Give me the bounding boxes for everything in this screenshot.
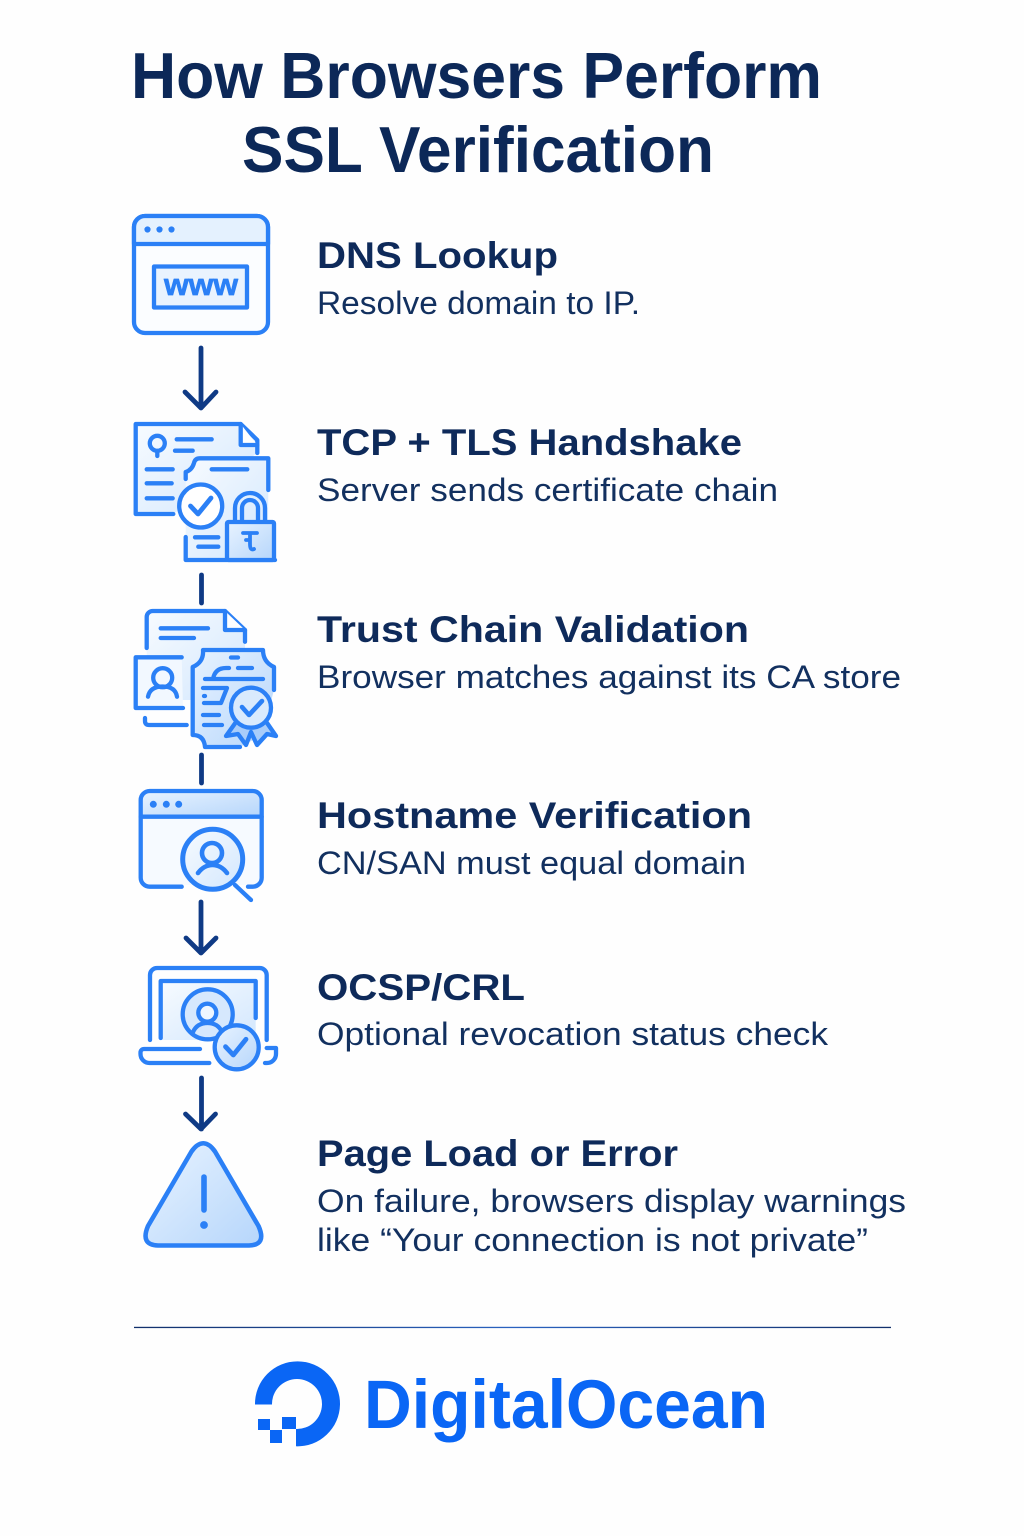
heading and text: DNS Lookup: DNS Lookup — [317, 235, 558, 276]
heading and text: Hostname Verification: CN/SAN must equal domain — [317, 845, 746, 881]
heading and text: Trust Chain Validation — [317, 609, 901, 695]
icon: certificate documents with lock — [136, 424, 275, 560]
title: How Browsers Perform — [131, 39, 822, 112]
arrow: step 4 to 5 — [186, 902, 216, 953]
heading and text: OCSP/CRL: OCSP/CRL — [317, 967, 525, 1008]
icon: browser window with www: www — [163, 267, 239, 302]
icon: browser window with magnifier and user — [141, 791, 262, 900]
heading and text: Page Load or Error — [317, 1133, 906, 1258]
title: SSL Verification — [242, 113, 714, 186]
heading and text: TCP + TLS Handshake: Server sends certificate chain — [317, 472, 778, 508]
logo: DigitalOcean — [255, 1361, 768, 1446]
heading and text: OCSP/CRL: Optional revocation status check — [317, 1016, 829, 1052]
icon: laptop with user and check badge — [140, 968, 276, 1069]
connector: step 2 to 3 — [199, 575, 204, 603]
heading and text: Page Load or Error: On failure, browsers display warnings — [317, 1183, 906, 1219]
heading and text: Hostname Verification — [317, 795, 752, 881]
icon: browser window with www — [134, 216, 268, 333]
icon: warning triangle — [146, 1143, 261, 1246]
wordmark: DigitalOcean — [364, 1366, 768, 1443]
heading and text: Trust Chain Validation: Browser matches against its CA store — [317, 659, 901, 695]
heading and text: DNS Lookup — [317, 235, 640, 321]
heading and text: OCSP/CRL — [317, 967, 829, 1052]
connector: step 3 to 4 — [199, 755, 204, 783]
arrow: step 1 to 2 — [185, 348, 216, 408]
heading and text: TCP + TLS Handshake — [317, 422, 778, 508]
heading and text: Trust Chain Validation: Trust Chain Validation — [317, 609, 749, 650]
icon: DigitalOcean ring — [255, 1361, 340, 1446]
icon: documents, ID card and certificate seal — [136, 611, 276, 747]
heading and text: TCP + TLS Handshake: TCP + TLS Handshake — [317, 422, 742, 463]
arrow: step 5 to 6 — [186, 1078, 216, 1129]
heading and text: DNS Lookup: Resolve domain to IP. — [317, 285, 640, 321]
title — [131, 39, 822, 186]
heading and text: Hostname Verification: Hostname Verification — [317, 795, 752, 836]
heading and text: Page Load or Error: like “Your connection is not private” — [317, 1222, 868, 1258]
heading and text: Page Load or Error: Page Load or Error — [317, 1133, 678, 1174]
